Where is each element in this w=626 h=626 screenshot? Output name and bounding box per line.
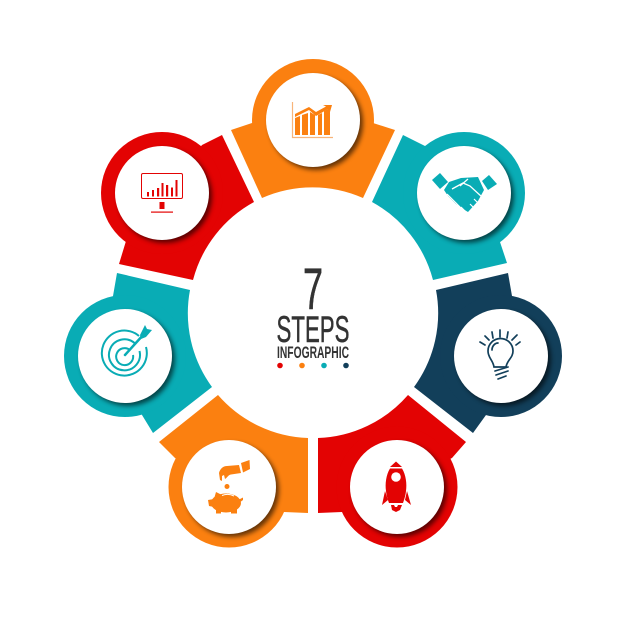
icon: growth chart [292, 102, 333, 138]
title: 7 steps infographic: 7 [303, 257, 323, 322]
panel: step teal right [372, 132, 525, 280]
panel: step orange top [231, 59, 395, 198]
panel: step orange bottom left [159, 395, 308, 548]
decorative colored dots [277, 363, 349, 368]
panel: step navy right [414, 273, 562, 433]
icon: hand and piggy bank [208, 460, 250, 514]
panel: step teal left [64, 273, 212, 433]
title: 7 steps infographic: STEPS [276, 309, 350, 350]
icon: handshake [432, 173, 497, 212]
icon: light bulb [480, 330, 520, 379]
icon: monitor with bars [142, 174, 182, 213]
title: 7 steps infographic [276, 257, 350, 362]
panel: step red top left [101, 132, 254, 280]
icon: rocket [382, 462, 411, 512]
7 steps circular infographic [64, 59, 562, 548]
icon: target with arrow [102, 325, 152, 376]
title: 7 steps infographic: INFOGRAPHIC [277, 344, 349, 362]
panel: step red bottom right [318, 395, 466, 548]
